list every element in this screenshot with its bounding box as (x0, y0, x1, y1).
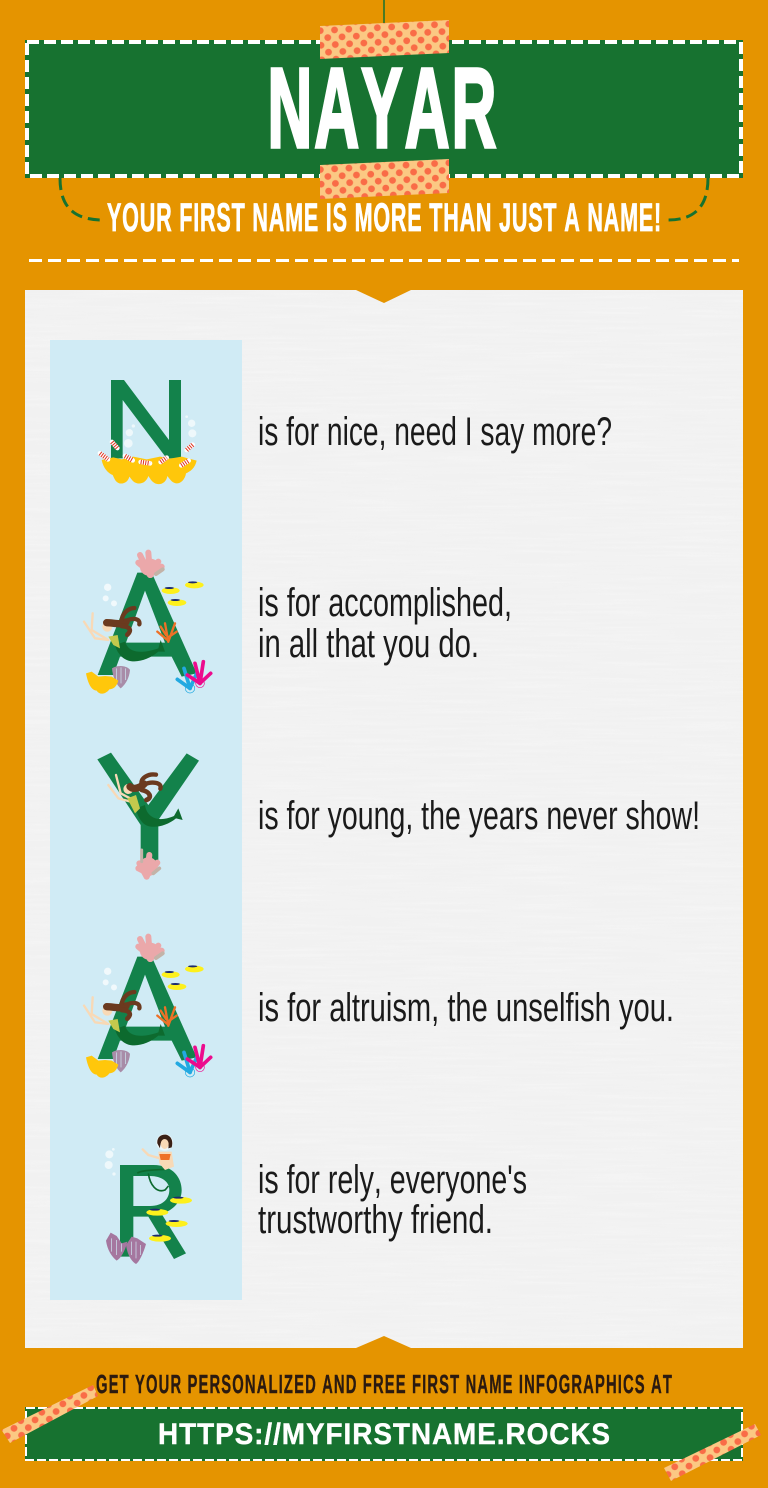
icon: letter Y with mermaid and coral (97, 753, 199, 877)
text: R line block: trustworthy friend. (258, 1198, 493, 1242)
icon: second letter A with mermaid and corals (84, 937, 211, 1078)
title: NAYAR (268, 45, 498, 171)
text: R line block: is for rely, everyone's (258, 1158, 527, 1202)
footer url: HTTPS://MYFIRSTNAME.ROCKS (158, 1418, 611, 1451)
hanging line (383, 0, 385, 25)
text: N: is for nice, need I say more? (258, 410, 612, 454)
text: A line block: in all that you do. (258, 622, 479, 666)
connector: right (668, 178, 708, 220)
dashed divider (29, 259, 739, 262)
text: A line block (258, 581, 512, 666)
footer banner (25, 1407, 743, 1461)
text: A line block: is for accomplished, (258, 581, 512, 625)
panel: letter column (50, 340, 242, 1300)
icon: letter N with coral and fish (100, 380, 197, 484)
text: R line block (258, 1158, 527, 1242)
icon: letter A with mermaid and corals (84, 553, 211, 694)
header banner (25, 40, 743, 178)
tape: footer right (664, 1424, 761, 1481)
tape: footer left (2, 1385, 98, 1443)
panel: paper (25, 290, 743, 1348)
tape: bottom of banner (320, 159, 449, 199)
icon: letter R with mermaid, fish and coral (105, 1134, 192, 1264)
connector: left (60, 178, 103, 220)
tape: top of banner (320, 20, 449, 59)
